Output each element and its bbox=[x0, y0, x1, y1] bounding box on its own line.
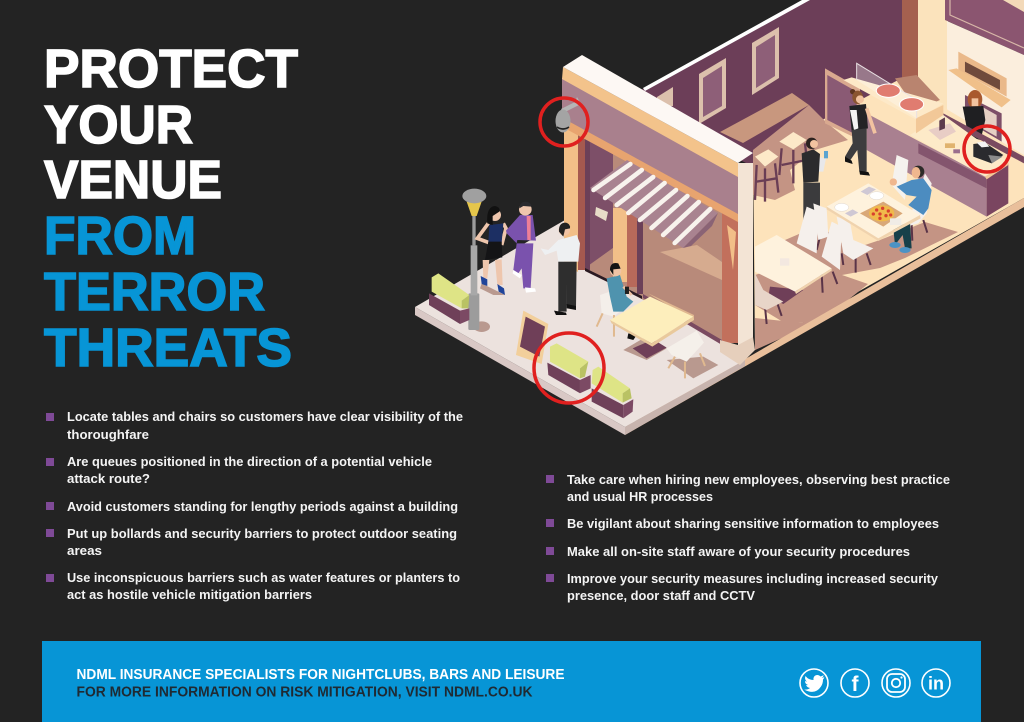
icon: facebook: f bbox=[852, 673, 860, 696]
seated man chair and pants bbox=[889, 173, 932, 253]
interior counter and staff bbox=[755, 52, 1024, 220]
title: YOUR bbox=[44, 95, 193, 155]
pavement shadows bbox=[473, 283, 718, 378]
icon: twitter bbox=[800, 669, 828, 697]
planter centre bbox=[547, 343, 591, 393]
table one bbox=[827, 183, 921, 241]
shopfront window interior bbox=[578, 125, 722, 345]
table two bbox=[755, 235, 832, 294]
footer text: NDML INSURANCE SPECIALISTS FOR NIGHTCLUBS, BARS AND LEISURE bbox=[76, 667, 565, 683]
counter floor patch bbox=[895, 75, 940, 110]
left bullet list: Are queues positioned in the direction of a potential vehicle bbox=[67, 454, 432, 469]
icon: facebook bbox=[841, 669, 869, 697]
left bullet list: Locate tables and chairs so customers have clear visibility of the bbox=[67, 409, 463, 424]
title: THREATS bbox=[44, 318, 292, 378]
floor shadows bbox=[753, 105, 958, 350]
icon: linkedin: in bbox=[928, 674, 944, 694]
left bullet list: Use inconspicuous barriers such as water features or planters to bbox=[67, 570, 460, 585]
man in purple suit bbox=[506, 202, 536, 293]
title: FROM bbox=[44, 206, 196, 266]
counter body bbox=[843, 77, 1008, 217]
left bullet list: Avoid customers standing for lengthy periods against a building bbox=[67, 499, 458, 514]
right bullet list: Be vigilant about sharing sensitive information to employees bbox=[567, 516, 939, 531]
left bullet list: Put up bollards and security barriers to protect outdoor seating bbox=[67, 526, 457, 541]
cafe table bbox=[610, 293, 694, 347]
seated woman chair bbox=[597, 292, 623, 337]
right bullet list: and usual HR processes bbox=[567, 489, 713, 504]
outdoor chair bbox=[667, 331, 705, 378]
security camera bbox=[556, 97, 581, 132]
laptop payment terminal bbox=[973, 141, 1003, 163]
waiter with vest bbox=[802, 138, 828, 220]
title: PROTECT bbox=[44, 39, 298, 99]
corner pillar bbox=[564, 125, 578, 272]
back wall with pictures bbox=[630, 0, 905, 170]
red highlight: planter barrier bbox=[534, 333, 604, 403]
footer banner bbox=[42, 641, 981, 722]
title: VENUE bbox=[44, 150, 222, 210]
red highlight: camera bbox=[540, 98, 588, 146]
pavement bbox=[415, 220, 745, 435]
waitress bbox=[845, 89, 875, 176]
alcove frame bbox=[825, 68, 860, 140]
right bullet list: Improve your security measures including increased security bbox=[567, 571, 939, 586]
planter right bbox=[592, 367, 633, 418]
title: TERROR bbox=[44, 262, 265, 322]
fascia and roof trim bbox=[562, 55, 753, 222]
left bullet list: attack route? bbox=[67, 471, 150, 486]
stools bbox=[755, 143, 808, 202]
isometric venue illustration bbox=[415, 0, 1024, 435]
right side upper walls bbox=[902, 0, 1024, 160]
back strip bbox=[943, 113, 1024, 163]
man in white shirt bbox=[541, 223, 580, 315]
red highlight: terminal bbox=[964, 126, 1010, 172]
title bbox=[44, 39, 298, 378]
right bullet list: Make all on-site staff aware of your security procedures bbox=[567, 544, 910, 559]
right bullet list: presence, door staff and CCTV bbox=[567, 588, 755, 603]
footer text: FOR MORE INFORMATION ON RISK MITIGATION, VISIT NDML.CO.UK bbox=[76, 684, 533, 700]
seated woman bbox=[607, 263, 637, 340]
server woman bbox=[963, 90, 985, 140]
left bullet list: areas bbox=[67, 543, 102, 558]
awning bbox=[590, 160, 718, 248]
chair legs bbox=[765, 220, 927, 324]
dining tables and customer bbox=[755, 155, 932, 324]
street scene bbox=[429, 189, 718, 418]
footer text bbox=[76, 667, 565, 700]
icon: linkedin bbox=[922, 669, 950, 697]
left bullet list bbox=[46, 409, 463, 602]
right bullet list: Take care when hiring new employees, observing best practice bbox=[567, 472, 950, 487]
oven wall feature bbox=[948, 52, 1011, 142]
left bullet list: thoroughfare bbox=[67, 427, 149, 442]
icon: instagram bbox=[882, 669, 910, 697]
right bullet list bbox=[546, 472, 950, 603]
table base bbox=[633, 339, 667, 358]
right pillar bbox=[720, 163, 755, 365]
woman in dress bbox=[477, 206, 506, 295]
cafe floor bbox=[753, 78, 1024, 350]
table two underside bbox=[768, 287, 803, 304]
building edge skirting bbox=[625, 198, 1024, 435]
white chairs bbox=[755, 203, 873, 310]
A-board sign bbox=[516, 311, 548, 364]
lamp post bbox=[462, 189, 486, 330]
planter left bbox=[429, 273, 469, 324]
pizza display with glass bbox=[857, 63, 924, 118]
seated man bbox=[890, 155, 932, 215]
left bullet list: act as hostile vehicle mitigation barriers bbox=[67, 587, 312, 602]
till bbox=[928, 117, 960, 153]
